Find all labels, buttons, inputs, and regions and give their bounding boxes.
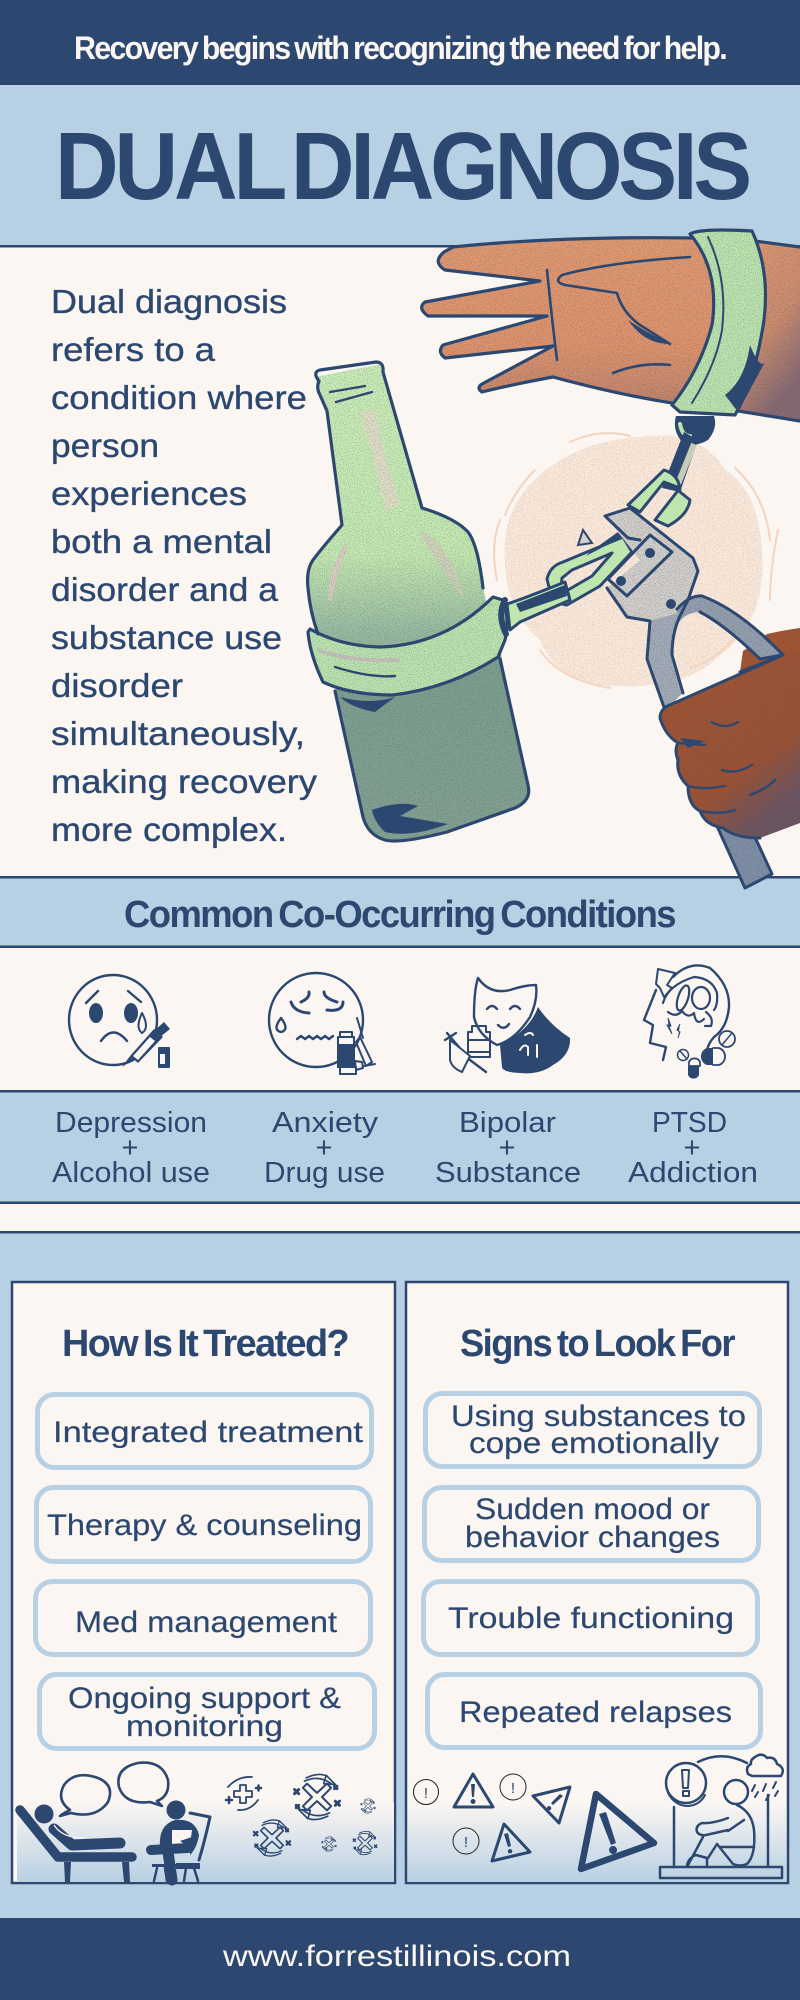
icon: crying face with syringe: [69, 975, 170, 1068]
lower link to bottle: [507, 582, 570, 630]
item: integrated treatment: [38, 1394, 372, 1468]
icon: theatre masks with vial: [445, 978, 570, 1073]
label: bipolar and substance: Bipolar: [459, 1107, 556, 1139]
item: repeated relapses: Repeated relapses: [459, 1696, 732, 1729]
top banner: [0, 0, 800, 85]
item: med management: [36, 1582, 370, 1654]
section heading: Common Co-Occurring Conditions: [124, 894, 675, 936]
item: repeated relapses: [428, 1674, 760, 1748]
chain: [501, 416, 715, 634]
icon: person sitting under rain with warning sign: [660, 1755, 783, 1878]
label: PTSD and addiction: +: [684, 1132, 700, 1164]
handcuff: [672, 230, 766, 415]
upper long link: [662, 432, 698, 492]
icon: head with brain and pills: [644, 965, 735, 1079]
pliers: [605, 508, 783, 710]
band: common conditions heading: [0, 876, 800, 948]
item: mood changes: behavior changes: [465, 1521, 720, 1554]
intro paragraph: condition where: [51, 379, 307, 416]
gripping hand, front part: [660, 650, 800, 838]
icon: therapist in chair: [151, 1800, 210, 1881]
panel heading: How Is It Treated?: [62, 1323, 348, 1365]
item: trouble functioning: [424, 1582, 758, 1654]
dust cloud behind the pliers: [494, 433, 778, 688]
icon: anxious face with pills and syringe: [269, 973, 375, 1074]
icon: warning signs: [414, 1774, 654, 1869]
label: anxiety and drugs: Anxiety: [272, 1107, 379, 1139]
intro paragraph: both a mental: [51, 523, 272, 560]
illustration: bottle chained to wrist, pliers cutting the chain: [308, 230, 800, 888]
item: integrated treatment: Integrated treatment: [53, 1416, 364, 1449]
intro paragraph: disorder and a: [51, 571, 279, 608]
label: depression and alcohol: Alcohol use: [52, 1157, 210, 1189]
panel: signs to look for: [406, 1282, 788, 1883]
label: anxiety and drugs: Drug use: [264, 1157, 385, 1189]
panel heading: Signs to Look For: [460, 1323, 736, 1365]
item: med management: Med management: [75, 1606, 338, 1639]
item: coping with substances: [426, 1394, 760, 1466]
label: depression and alcohol: +: [122, 1132, 138, 1164]
footer: [0, 1918, 800, 2000]
intro paragraph: [51, 283, 318, 848]
lower ring link: [547, 537, 632, 605]
label: anxiety and drugs: +: [316, 1132, 332, 1164]
intro paragraph: simultaneously,: [51, 715, 305, 752]
item: mood changes: Sudden mood or: [475, 1493, 710, 1526]
gripping hand, back part: [740, 628, 800, 700]
upper top link: [675, 416, 715, 445]
intro paragraph: disorder: [51, 667, 183, 704]
website: www.forrestillinois.com: [222, 1940, 571, 1973]
speech bubble: [118, 1763, 168, 1806]
label: PTSD and addiction: PTSD: [652, 1107, 727, 1139]
label: bipolar and substance: Substance: [435, 1157, 581, 1189]
label: anxiety and drugs: [264, 1107, 385, 1189]
band: condition labels: [0, 1090, 800, 1204]
icon: medical cycle symbols: [226, 1774, 377, 1856]
item: therapy and counseling: Therapy & counseling: [47, 1509, 362, 1542]
item: therapy and counseling: [36, 1488, 370, 1562]
item: ongoing support: [40, 1674, 374, 1748]
title: DUAL DIAGNOSIS: [55, 113, 749, 220]
title band: [0, 85, 800, 248]
intro paragraph: Dual diagnosis: [51, 283, 287, 320]
item: ongoing support: monitoring: [126, 1710, 283, 1743]
panel: how is it treated: [12, 1282, 395, 1883]
icon: warning signs: !: [464, 1834, 468, 1851]
banner tagline: Recovery begins with recognizing the need for help.: [74, 30, 726, 66]
icon: warning signs: !: [511, 1780, 515, 1797]
label: depression and alcohol: [52, 1107, 210, 1189]
intro paragraph: making recovery: [51, 763, 318, 800]
item: ongoing support: Ongoing support &: [68, 1682, 341, 1715]
bottle: [308, 362, 529, 841]
lower section background: [0, 1231, 800, 1918]
label: PTSD and addiction: Addiction: [628, 1157, 758, 1189]
label: bipolar and substance: +: [499, 1132, 515, 1164]
speech bubble: [60, 1775, 110, 1816]
intro paragraph: experiences: [51, 475, 247, 512]
upper ring link: [628, 470, 690, 526]
intro paragraph: substance use: [51, 619, 282, 656]
icon: warning signs: !: [424, 1785, 428, 1802]
item: coping with substances: Using substances to: [451, 1400, 746, 1433]
intro paragraph: refers to a: [51, 331, 216, 368]
icon: patient on couch: [20, 1763, 168, 1882]
item: coping with substances: cope emotionally: [469, 1427, 719, 1460]
intro paragraph: person: [51, 427, 159, 464]
wrist and arm: [422, 230, 800, 421]
label: bipolar and substance: [435, 1107, 581, 1189]
label: depression and alcohol: Depression: [55, 1107, 207, 1139]
label: PTSD and addiction: [628, 1107, 758, 1189]
lower plier handle: [712, 815, 772, 888]
item: mood changes: [424, 1488, 758, 1560]
intro paragraph: more complex.: [51, 811, 287, 848]
item: trouble functioning: Trouble functioning: [448, 1602, 734, 1635]
